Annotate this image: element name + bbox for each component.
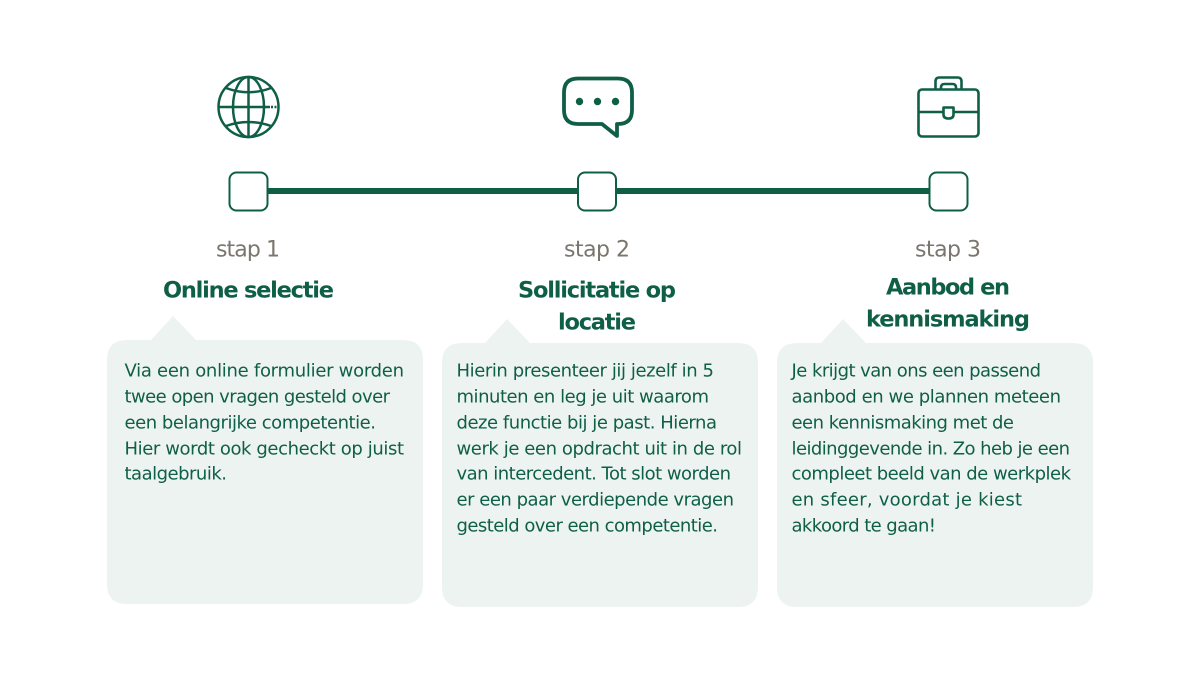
- text: step 3 description: aanbod en we plannen meteen: [792, 386, 1061, 407]
- text: step 3 description: compleet beeld van de werkplek: [792, 463, 1072, 484]
- panel: step 1: [107, 316, 423, 604]
- heading: step 2: Sollicitatie op: [518, 277, 676, 303]
- text: step 3 description: Je krijgt van ons een passend: [790, 360, 1041, 381]
- text: step 2 description: Hierin presenteer jij jezelf in 5: [456, 360, 714, 381]
- text: step 1 description: [124, 360, 404, 484]
- text: step 1 description: twee open vragen gesteld over: [124, 386, 391, 407]
- icon: globe: [218, 77, 279, 137]
- heading: step 3: [866, 274, 1030, 332]
- timeline line: [266, 188, 931, 194]
- text: step 2 description: minuten en leg je uit waarom: [456, 386, 709, 407]
- panel: step 2: [442, 319, 758, 607]
- text: step 3 description: akkoord te gaan!: [792, 515, 936, 536]
- heading: step 2: locatie: [558, 309, 636, 335]
- heading: step 3: Aanbod en: [886, 274, 1010, 300]
- text: step 2 description: er een paar verdiepende vragen: [456, 489, 734, 510]
- text: step 1 description: een belangrijke competentie.: [124, 412, 376, 433]
- text: step 1 description: taalgebruik.: [124, 463, 227, 484]
- node: step 1: [230, 172, 268, 210]
- text: step 3 description: een kennismaking met de: [792, 412, 1014, 433]
- node: step 3: [930, 172, 968, 210]
- panel: step 3: [777, 319, 1093, 607]
- text: step 3 description: en sfeer, voordat je kiest: [792, 489, 1022, 510]
- text: step 3 description: leidinggevende in. Zo heb je een: [792, 438, 1070, 459]
- text: step 1 description: Hier wordt ook gecheckt op juist: [124, 438, 404, 459]
- text: step 2 description: [456, 360, 742, 536]
- label: stap 2: stap 2: [564, 237, 630, 262]
- heading: step 2: [518, 277, 676, 335]
- text: step 2 description: werk je een opdracht uit in de rol: [456, 438, 742, 459]
- label: stap 3: stap 3: [915, 237, 981, 262]
- icon: briefcase: [918, 78, 978, 136]
- text: step 2 description: deze functie bij je past. Hierna: [456, 412, 717, 433]
- text: step 2 description: gesteld over een competentie.: [456, 515, 718, 536]
- text: step 1 description: Via een online formulier worden: [124, 360, 404, 381]
- label: stap 1: stap 1: [216, 237, 280, 262]
- node: step 2: [578, 172, 616, 210]
- text: step 3 description: [790, 360, 1072, 536]
- icon: speech bubble: [564, 78, 632, 136]
- heading: step 1: Online selectie: [163, 277, 334, 303]
- text: step 2 description: van intercedent. Tot slot worden: [456, 463, 731, 484]
- heading: step 3: kennismaking: [866, 306, 1030, 332]
